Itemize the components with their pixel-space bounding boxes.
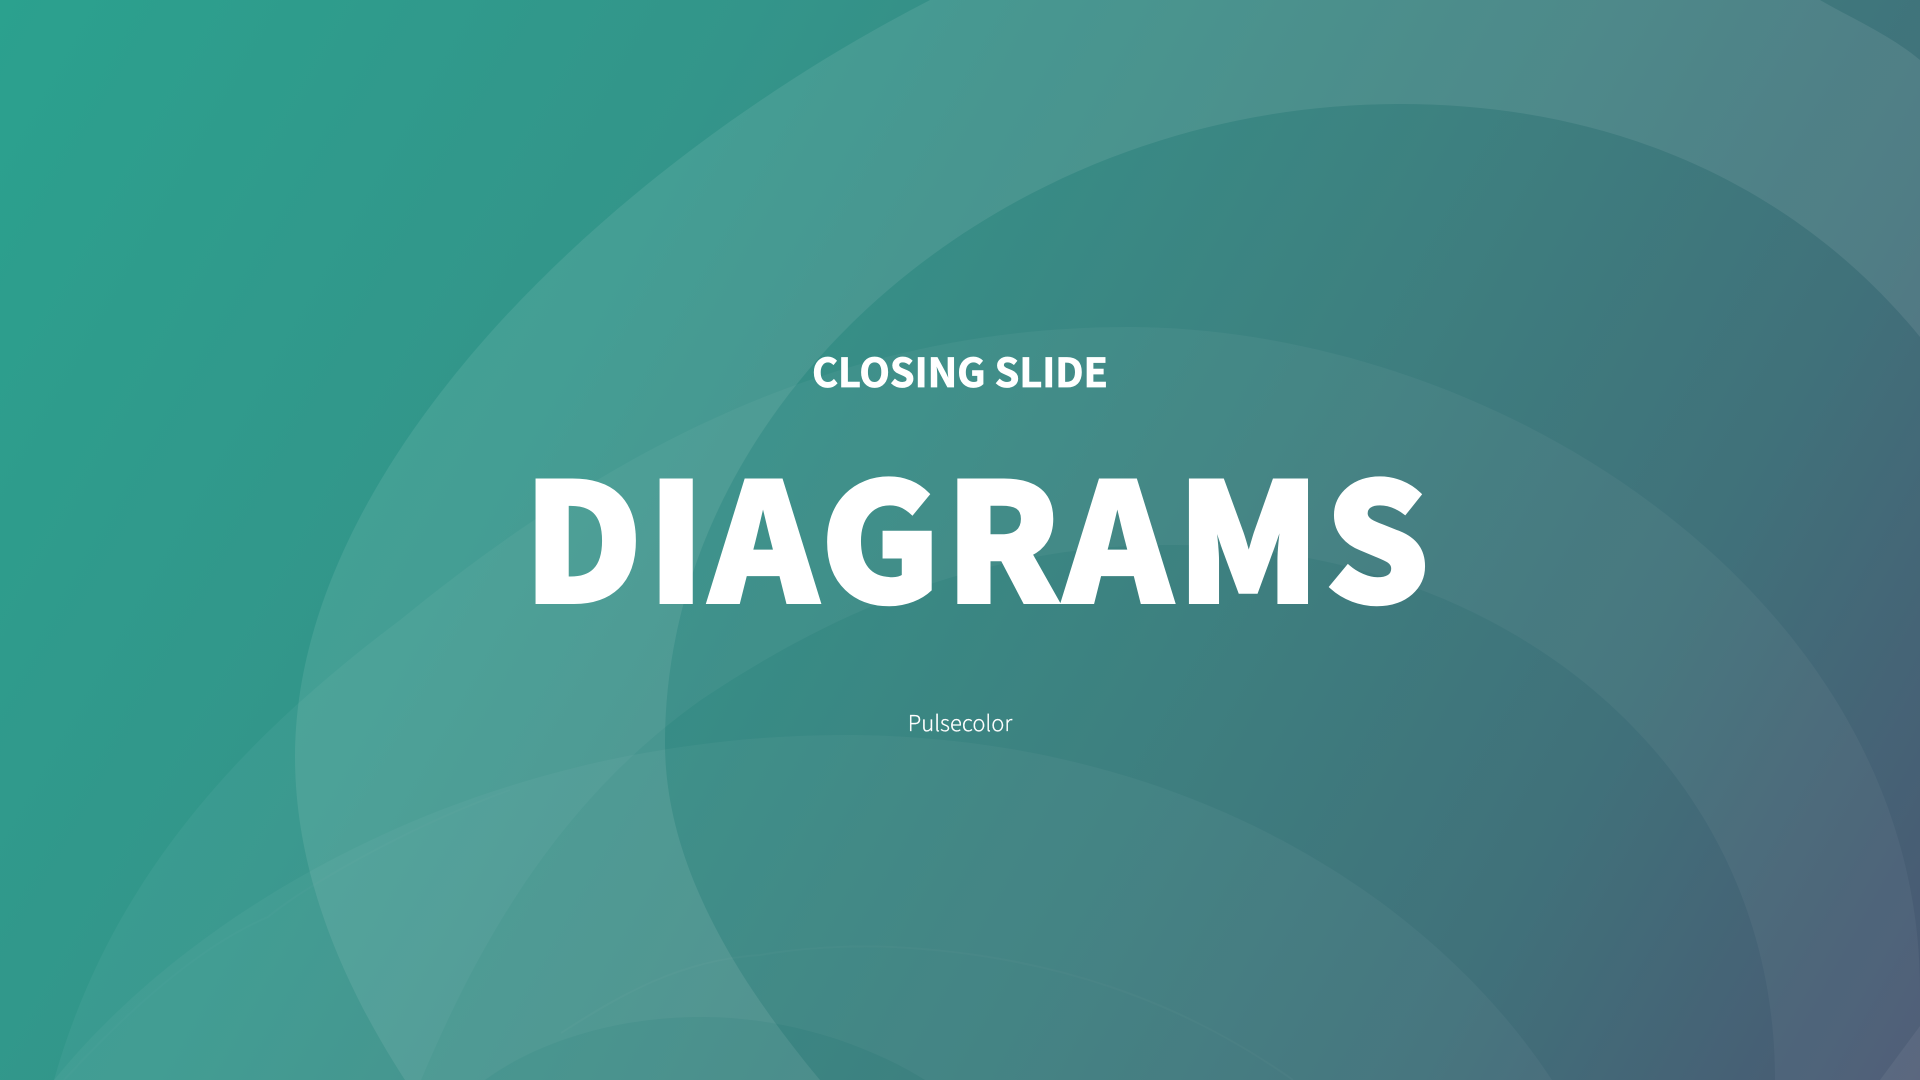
subtitle: CLOSING SLIDE	[812, 342, 1108, 399]
title: DIAGRAMS	[524, 413, 1434, 649]
author: Pulsecolor	[908, 706, 1012, 738]
